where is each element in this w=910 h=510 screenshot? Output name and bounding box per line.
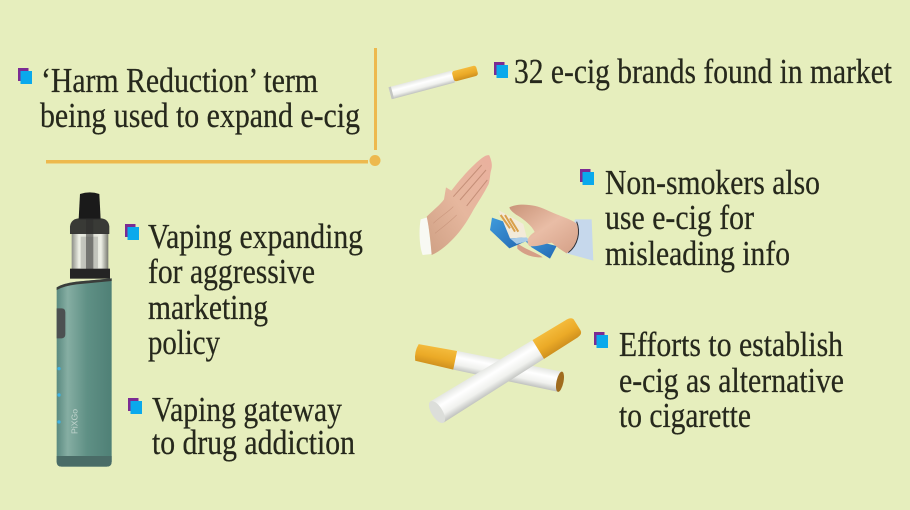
text block: non-smokers: Non-smokers also [605,163,820,202]
glass tank [72,233,108,269]
bullet icon [128,398,142,414]
divider: corner rule with dot [46,48,380,166]
text block: harm reduction [18,61,360,135]
bullet icon [594,332,608,348]
bullet icon [18,68,32,84]
text block: aggressive marketing: for aggressive [148,252,315,291]
body [57,278,112,467]
text block: aggressive marketing: marketing [148,288,268,327]
hand [509,205,578,253]
top shoulder [57,278,112,290]
brand mark: PiXGo [69,409,79,434]
text block: gateway [128,390,355,462]
text block: non-smokers [580,163,820,273]
sleeve [567,219,593,261]
mouthpiece [79,192,101,219]
cigarette pack [490,210,557,259]
icon: hand holding cigarette pack [490,205,593,261]
text block: gateway: Vaping gateway [152,390,342,429]
text block: efforts: Efforts to establish [619,325,843,364]
back cigarette [413,342,566,393]
text block: non-smokers: use e-cig for [605,198,754,237]
thumb [517,243,543,257]
bullet icon [494,62,508,78]
text block: non-smokers: misleading info [605,234,790,273]
icon: small e-cigarette [388,64,479,99]
bottom cap [57,456,112,467]
text block: aggressive marketing [125,217,363,362]
text block: aggressive marketing: policy [148,323,220,362]
bullet icon [125,224,139,240]
text block: efforts: to cigarette [619,396,751,435]
icon: crossed cigarettes [413,315,584,426]
bullet icon [580,169,594,185]
LEDs [57,367,61,424]
text block: harm reduction: ‘Harm Reduction’ term [41,61,318,100]
text block: harm reduction: being used to expand e-cig [40,96,360,135]
text block: efforts: e-cig as alternative [619,361,844,400]
button [57,308,65,338]
e-cigarette front [426,315,584,426]
text block: gateway: to drug addiction [152,423,355,462]
text block: aggressive marketing: Vaping expanding [148,217,363,256]
icon: hand refusing [420,155,492,255]
text block: efforts [594,325,844,435]
icon: vape device [57,192,112,467]
tank collar [70,218,109,234]
tank base [70,269,110,279]
